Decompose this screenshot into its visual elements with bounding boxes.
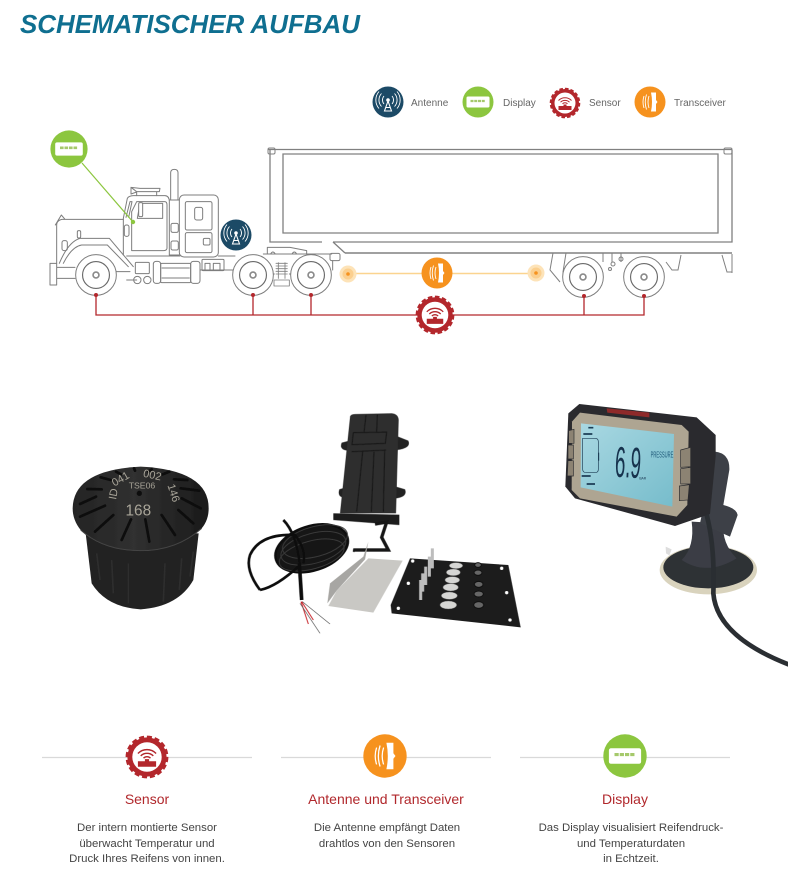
- sensor engraved 002: 002: [142, 468, 162, 483]
- sensor engraved 168: 168: [126, 502, 151, 519]
- icon: antenna legend: [372, 86, 404, 118]
- truck tractor line drawing: [50, 169, 340, 286]
- drive axle wheel 2: [291, 255, 331, 295]
- icon: sensor on truck: [417, 297, 453, 333]
- photo: antenna transceiver kit: [249, 413, 521, 633]
- icon: transceiver on truck: [422, 258, 452, 288]
- icon: sensor legend: [551, 89, 579, 117]
- icon: transceiver legend: [634, 86, 666, 118]
- cable: [707, 515, 788, 665]
- transceiver ears: [339, 436, 409, 499]
- heading: antenne und transceiver: Antenne und Transceiver: [308, 791, 464, 807]
- panel: sensor: [69, 737, 225, 865]
- text: sensor description: Der intern montierte Sensor: [77, 822, 217, 834]
- photo: display unit: 6.9: [614, 439, 642, 488]
- text: display description: Das Display visualisiert Reifendruck-: [539, 822, 724, 834]
- front axle wheel: [76, 255, 116, 295]
- trailer outline: [268, 148, 732, 282]
- metal bracket: [327, 542, 368, 603]
- heading: display: Display: [602, 791, 648, 807]
- text: sensor description: überwacht Temperatur und: [79, 838, 215, 850]
- trailer wheel 2: [624, 257, 664, 297]
- icon: antenna on truck: [220, 220, 252, 250]
- transceiver connection: [340, 258, 544, 288]
- buttons: [567, 429, 691, 501]
- lcd unit: BAR: [639, 476, 647, 480]
- legend: [372, 86, 727, 118]
- trailer wheel 1: [563, 257, 603, 297]
- legend label: Display: Display: [503, 98, 536, 109]
- icon: display on truck: [50, 130, 88, 168]
- text: display description: in Echtzeit.: [603, 853, 659, 865]
- photo: tire sensor: [73, 467, 209, 609]
- drive axle wheel 1: [233, 255, 273, 295]
- lcd vehicle outline: [583, 438, 598, 473]
- icon: transceiver: [363, 734, 407, 778]
- sensor engraved ID left: ID: [107, 488, 121, 501]
- text: antenne description: drahtlos von den Sensoren: [319, 838, 455, 850]
- title: SCHEMATISCHER AUFBAU: [20, 9, 361, 39]
- text: antenne description: Die Antenne empfängt Daten: [314, 822, 460, 834]
- mounting plate: [391, 558, 521, 627]
- photo: display unit: [565, 404, 788, 665]
- panel: display: [539, 734, 724, 865]
- legend label: Sensor: Sensor: [589, 98, 621, 109]
- display pointer line: [82, 163, 135, 224]
- cable coil: [249, 516, 354, 600]
- text: sensor description: Druck Ihres Reifens von innen.: [69, 853, 225, 865]
- legend label: Transceiver: Transceiver: [674, 98, 727, 109]
- icon: display: [603, 734, 647, 778]
- heading: sensor: Sensor: [125, 791, 170, 807]
- icon: sensor: [127, 737, 167, 777]
- sensor wiring: [94, 293, 646, 333]
- divider lines: [42, 756, 730, 758]
- panel: antenne und transceiver: [308, 734, 464, 850]
- legend label: Antenne: Antenne: [411, 98, 449, 109]
- display housing: [565, 404, 716, 526]
- lcd label pressure: PRESSURE: [651, 451, 673, 460]
- sensor engraved 146: 146: [164, 483, 182, 504]
- sensor engraved TSE06: TSE06: [129, 481, 155, 491]
- sensor engraved 041: 041: [110, 470, 132, 489]
- mount arm: [700, 452, 738, 537]
- suction base: [660, 546, 757, 594]
- icon: display legend: [462, 86, 494, 118]
- text: display description: und Temperaturdaten: [577, 838, 685, 850]
